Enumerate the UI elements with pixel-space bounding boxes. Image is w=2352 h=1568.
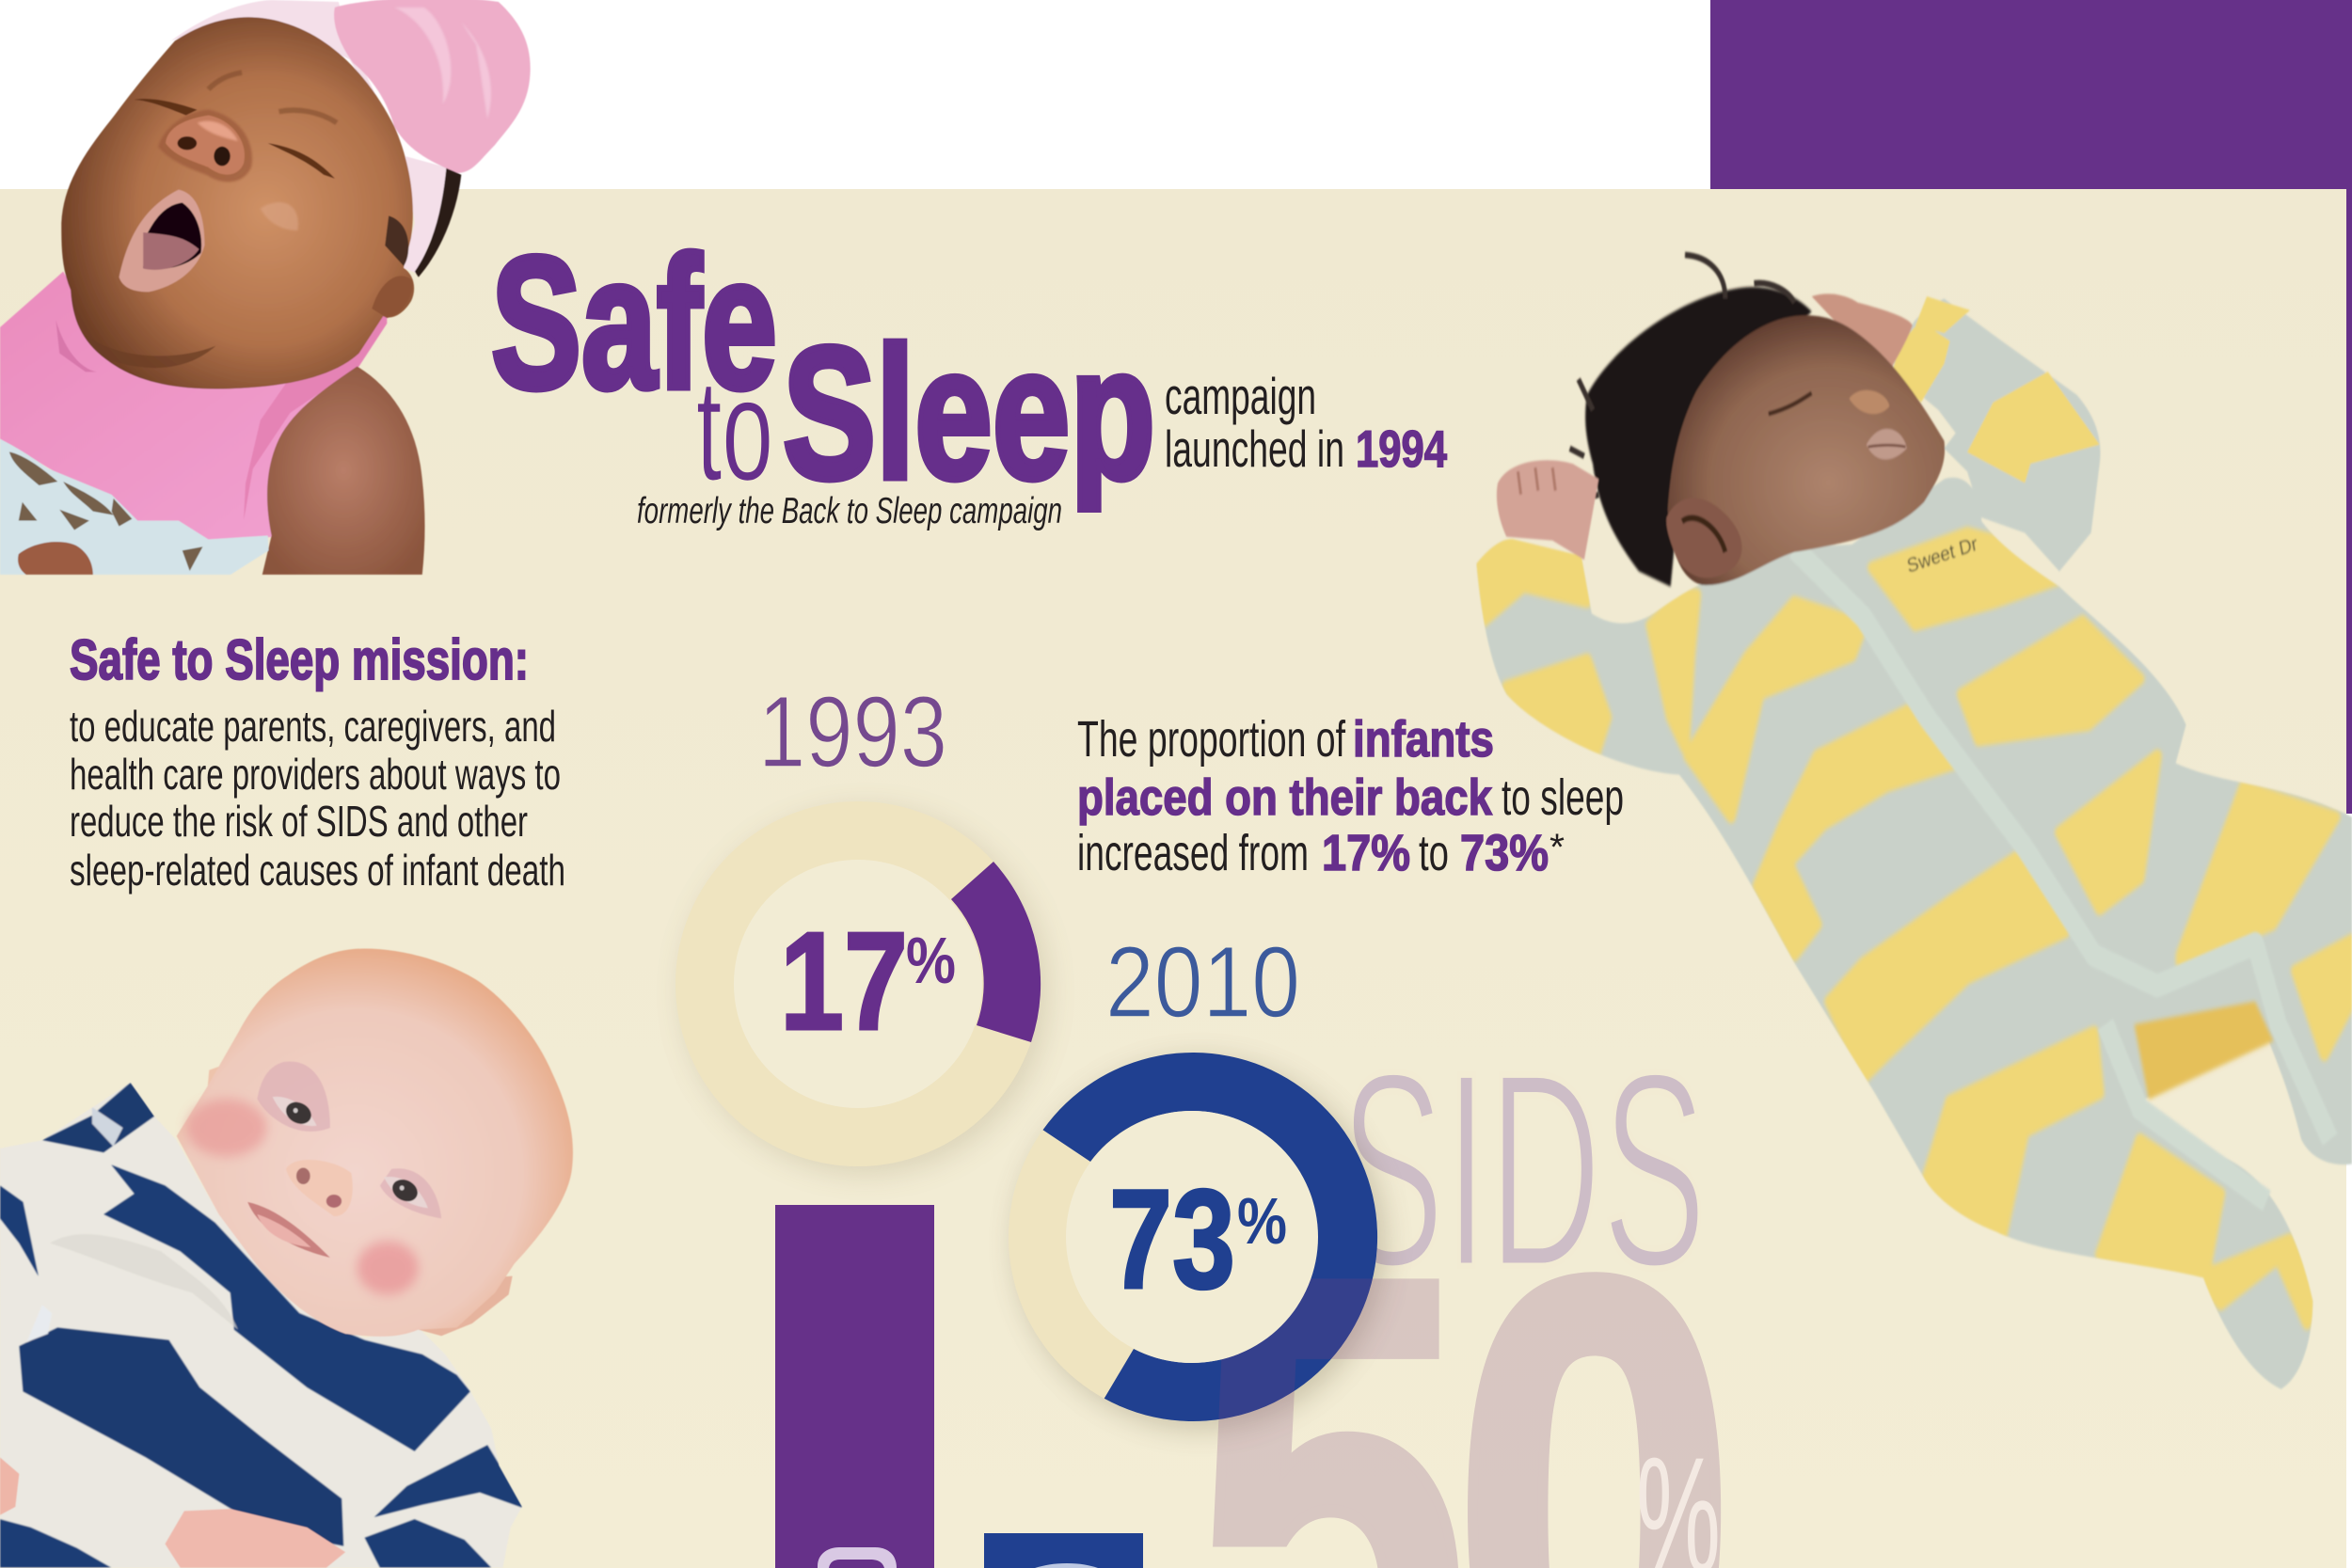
- mission text: reduce the risk of SIDS and other: [70, 797, 528, 846]
- statistic text: infants placed on their back: infants: [1353, 711, 1494, 768]
- donut value: 73%: %: [1237, 1184, 1287, 1258]
- donut value: 17%: %: [906, 924, 956, 997]
- right page edge below the purple strip: [2346, 1166, 2352, 1568]
- mission text: health care providers about ways to: [70, 750, 561, 799]
- title word: Sleep: Sleep: [783, 309, 1155, 518]
- mission text: to educate parents, caregivers, and: [70, 702, 556, 751]
- year label: 1993: 1993: [758, 674, 947, 788]
- mission text: sleep-related causes of infant death: [70, 846, 565, 895]
- mission heading: Safe to Sleep mission:: [70, 628, 529, 691]
- donut value: 73%: 73: [1109, 1160, 1235, 1318]
- donut value: 17%: 17: [780, 904, 908, 1059]
- statistic text: infants placed on their back: [1077, 711, 1624, 881]
- SIDS ghost word: SIDS: [1340, 1014, 1707, 1325]
- photo: smiling baby in striped top: [0, 948, 573, 1568]
- mission text: [70, 702, 565, 895]
- statistic text: infants placed on their back: to sleep: [1502, 769, 1624, 826]
- bar icon: light blue glyph: [1035, 1563, 1098, 1568]
- statistic text: infants placed on their back: placed on their back: [1077, 769, 1493, 826]
- bar: blue: [984, 1533, 1143, 1568]
- purple top-right block: [1710, 0, 2352, 814]
- donut chart: 1993, 17%: [675, 801, 1048, 1174]
- title word: Safe: Safe: [491, 218, 777, 428]
- statistic text: infants placed on their back: *: [1549, 827, 1565, 868]
- statistic text: infants placed on their back: 17%: [1322, 825, 1410, 881]
- year label: 2010: 2010: [1105, 925, 1300, 1038]
- subtitle: formerly the Back to Sleep campaign: formerly the Back to Sleep campaign: [637, 491, 1062, 531]
- campaign launch text: 1994: [1356, 420, 1447, 478]
- campaign launch text: campaign: [1165, 367, 1316, 425]
- statistic text: infants placed on their back: 73%: [1460, 825, 1549, 881]
- descender cover keeping the p at its reference depth: [1035, 513, 1120, 528]
- suit logo text: Sweet Dr: [1905, 532, 1979, 577]
- photo: sleeping baby in yellow striped suit: [1471, 255, 2352, 1389]
- donut chart: 2010, 73%: [1009, 1053, 1737, 1568]
- bar icon: lavender glyph: [818, 1547, 897, 1568]
- campaign launch text: launched in: [1165, 420, 1344, 478]
- statistic text: infants placed on their back: to: [1419, 825, 1449, 881]
- big ghost number: 50%: [1193, 1143, 1737, 1568]
- statistic text: infants placed on their back: increased from: [1077, 825, 1309, 881]
- bar: purple: [775, 1205, 934, 1568]
- photo: yawning baby in pink: [0, 0, 531, 575]
- title word: to: to: [696, 349, 773, 511]
- statistic text: infants placed on their back: The proportion of: [1077, 711, 1346, 768]
- title: Safe to Sleep: [491, 218, 1155, 518]
- campaign launch text: [1165, 367, 1447, 478]
